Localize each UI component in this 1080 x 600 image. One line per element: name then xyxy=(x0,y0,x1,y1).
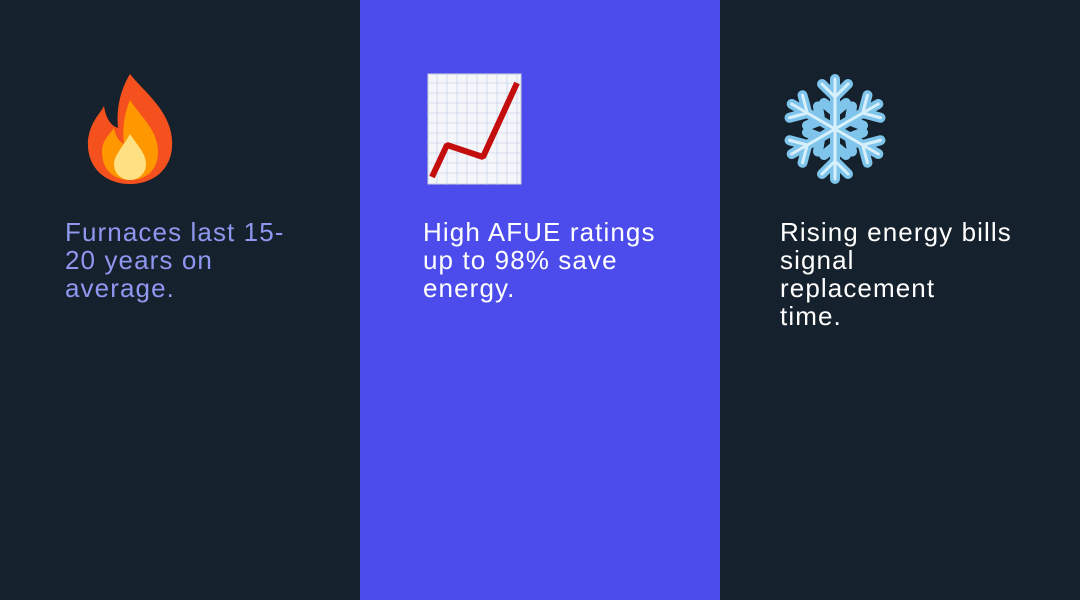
text: furnace lifespan: average. xyxy=(65,273,175,303)
text: AFUE ratings: High AFUE ratings xyxy=(423,217,656,247)
icon: fire xyxy=(88,74,172,184)
text: AFUE ratings xyxy=(423,217,656,303)
text: energy bills: replacement xyxy=(780,273,935,303)
panel: AFUE ratings xyxy=(360,0,720,600)
text: AFUE ratings: energy. xyxy=(423,273,516,303)
panel: furnace lifespan xyxy=(0,0,360,600)
text: energy bills xyxy=(780,217,1012,331)
icon: chart increasing xyxy=(427,73,522,185)
icon: snowflake xyxy=(784,74,886,184)
text: energy bills: time. xyxy=(780,301,842,331)
text: energy bills: signal xyxy=(780,245,855,275)
panel: energy bills xyxy=(720,0,1080,600)
text: furnace lifespan: 20 years on xyxy=(65,245,213,275)
text: AFUE ratings: up to 98% save xyxy=(423,245,618,275)
text: furnace lifespan: Furnaces last 15- xyxy=(65,217,285,247)
text: energy bills: Rising energy bills xyxy=(780,217,1012,247)
text: furnace lifespan xyxy=(65,217,285,303)
